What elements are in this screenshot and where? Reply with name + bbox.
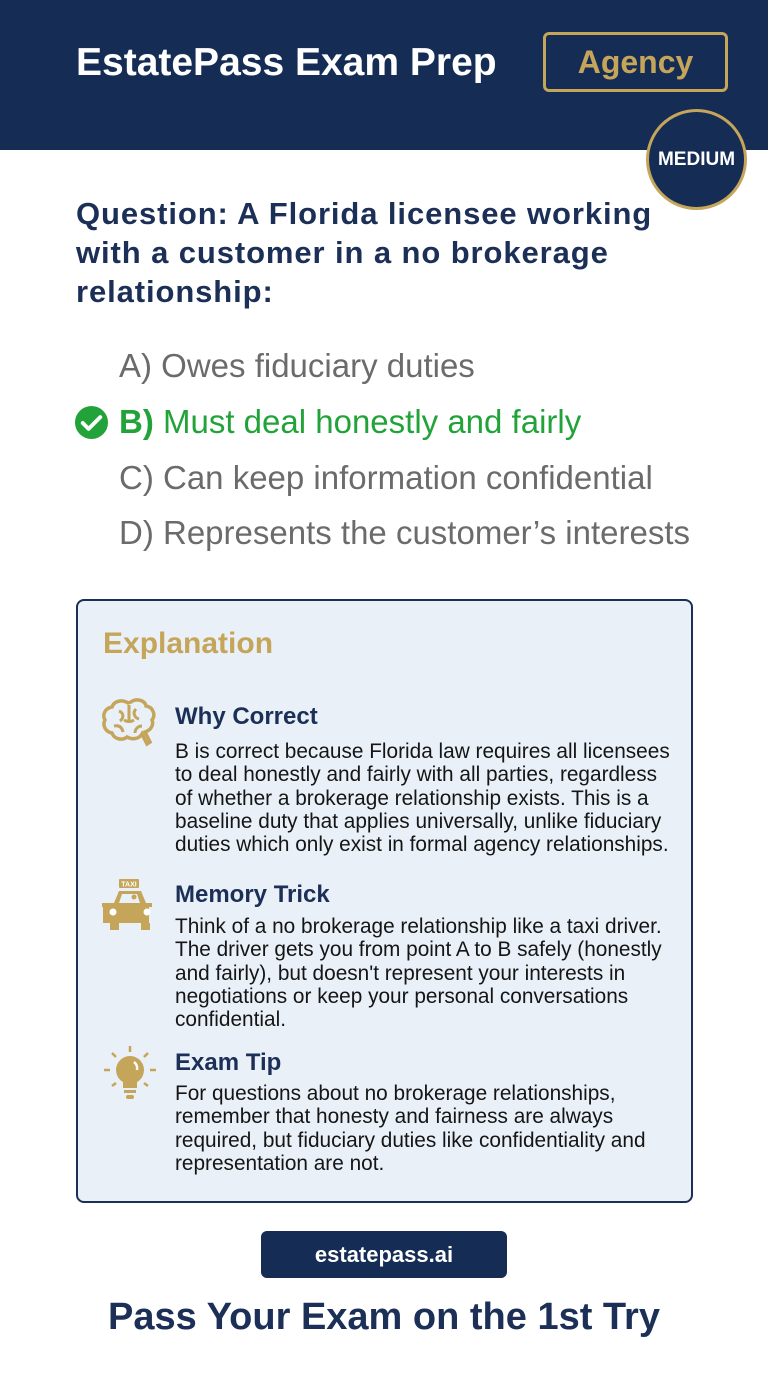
correct option B: B) Must deal honestly and fairly — [119, 403, 581, 440]
difficulty badge: MEDIUM — [658, 149, 735, 170]
option C: C) Can keep information confidential — [119, 459, 653, 496]
question: with a customer in a no brokerage — [76, 235, 609, 270]
question — [76, 196, 652, 309]
memory trick text: Think of a no brokerage relationship like a taxi driver. — [175, 915, 662, 938]
memory trick heading: Memory Trick — [175, 881, 330, 908]
category badge — [543, 32, 728, 92]
icon: taxi — [102, 879, 152, 930]
exam tip text — [175, 1082, 646, 1175]
why correct heading: Why Correct — [175, 703, 318, 730]
question: relationship: — [76, 274, 274, 309]
why correct text — [175, 740, 670, 856]
category badge: Agency — [578, 44, 693, 80]
panel: explanation — [76, 599, 693, 1203]
why correct text: duties which only exist in formal agency relationships. — [175, 833, 669, 856]
option D: D) Represents the customer’s interests — [119, 514, 690, 551]
header title: EstatePass Exam Prep — [76, 41, 497, 84]
why correct text: of whether a brokerage relationship exists. This is a — [175, 787, 649, 810]
exam tip text: representation are not. — [175, 1152, 384, 1175]
icon: brain — [102, 698, 156, 746]
tagline: Pass Your Exam on the 1st Try — [108, 1296, 660, 1338]
option A: A) Owes fiduciary duties — [119, 347, 475, 384]
explanation heading: Explanation — [103, 627, 273, 660]
why correct text: B is correct because Florida law requires all licensees — [175, 740, 670, 763]
exam tip heading: Exam Tip — [175, 1049, 281, 1076]
header bar — [0, 0, 768, 150]
icon: taxi: TAXI — [121, 882, 137, 888]
icon: check — [75, 406, 108, 439]
memory trick text: The driver gets you from point A to B safely (honestly — [175, 938, 662, 961]
why correct text: baseline duty that applies universally, unlike fiduciary — [175, 810, 661, 833]
memory trick text: negotiations or keep your personal conversations — [175, 985, 628, 1008]
memory trick text — [175, 915, 662, 1031]
exam tip text: For questions about no brokerage relationships, — [175, 1082, 615, 1105]
exam tip text: remember that honesty and fairness are always — [175, 1105, 613, 1128]
question: Question: A Florida licensee working — [76, 196, 652, 231]
why correct text: to deal honestly and fairly with all parties, regardless — [175, 763, 657, 786]
difficulty badge — [646, 109, 747, 210]
icon: lightbulb — [104, 1046, 156, 1099]
website pill — [261, 1231, 507, 1278]
memory trick text: confidential. — [175, 1008, 286, 1031]
exam tip text: required, but fiduciary duties like confidentiality and — [175, 1129, 646, 1152]
memory trick text: and fairly), but doesn't represent your interests in — [175, 962, 625, 985]
website pill: estatepass.ai — [315, 1242, 453, 1267]
